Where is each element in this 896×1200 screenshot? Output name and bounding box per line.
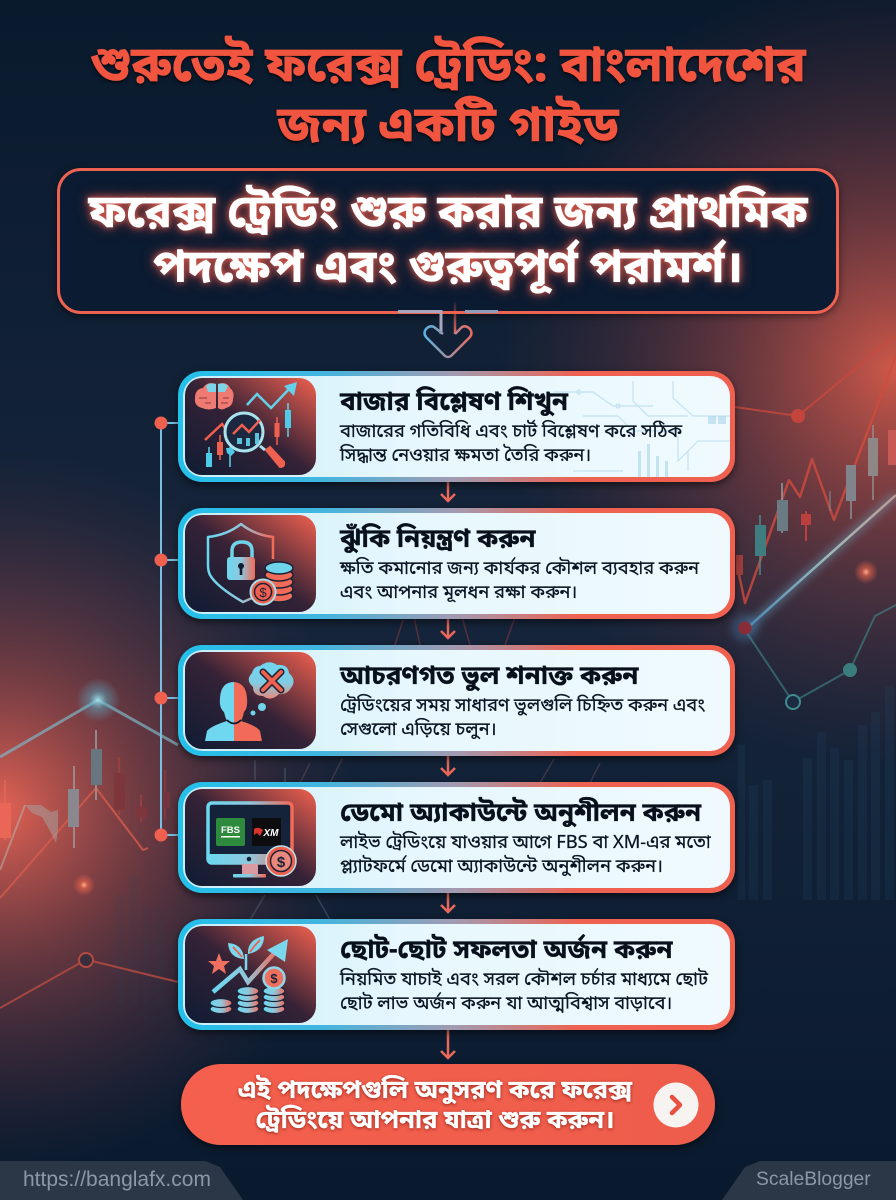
description: নিয়মিত যাচাই এবং সরল কৌশল চর্চার মাধ্যমে ছোট: [340, 969, 708, 993]
title: [90, 36, 808, 161]
left chart candles and nodes: [0, 678, 170, 967]
call to action button: [181, 1064, 715, 1145]
panel: step 2 risk control: এবং আপনার মূলধন রক্ষা করুন।: [340, 582, 577, 606]
footer tab: website: https://banglafx.com: [23, 1168, 211, 1191]
icon: growth arrow, plant and coin stacks: $: [270, 971, 278, 986]
right chart lines: [735, 335, 896, 702]
right chart candles and nodes: [731, 409, 896, 709]
bottom bars right: [738, 686, 894, 900]
heading: বাজার বিশ্লেষণ শিখুন: [340, 386, 568, 421]
central faint chart lines behind arrows: [250, 617, 600, 920]
panel: step 1 market analysis: সিদ্ধান্ত নেওয়ার ক্ষমতা তৈরি করুন।: [340, 445, 591, 469]
icon: brain, chart and magnifier: [185, 378, 316, 475]
arrow: subtitle down to steps: [398, 302, 498, 358]
panel: step 4 demo account: [178, 782, 735, 893]
icon: growth arrow, plant and coin stacks: [185, 926, 316, 1023]
panel: step 3 behavioural mistakes: [178, 645, 735, 756]
icon: chevron button: [654, 1082, 698, 1128]
icon: monitor with FBS and XM logos: FBS: [221, 825, 240, 836]
description: লাইভ ট্রেডিংয়ে যাওয়ার আগে FBS বা XM-এর মতো: [340, 832, 711, 856]
icon: monitor with FBS and XM logos: XM: [262, 828, 279, 839]
footer tab: brand: [720, 1161, 896, 1200]
panel: step 5 small wins: ছোট লাভ অর্জন করুন যা আত্মবিশ্বাস বাড়াবে।: [340, 993, 672, 1017]
icon: shield, lock and coins: [185, 515, 316, 612]
panel: step 1 market analysis: [178, 371, 735, 482]
title: শুরুতেই ফরেক্স ট্রেডিং: বাংলাদেশের: [90, 36, 806, 101]
icon: monitor with FBS and XM logos: $: [277, 854, 286, 871]
panel: step 3 behavioural mistakes: সেগুলো এড়িয়ে চলুন।: [340, 719, 497, 743]
heading: ডেমো অ্যাকাউন্টে অনুশীলন করুন: [340, 797, 701, 832]
circuit pattern: [553, 381, 730, 477]
arrow: step 4 to 5: [440, 893, 456, 914]
icon: person with thought bubble: [185, 652, 316, 749]
subtitle panel: [57, 168, 839, 314]
description: বাজারের গতিবিধি এবং চার্ট বিশ্লেষণ করে সঠিক: [340, 421, 682, 445]
subtitle panel: পদক্ষেপ এবং গুরুত্বপূর্ণ পরামর্শ।: [153, 240, 743, 301]
heading: ছোট-ছোট সফলতা অর্জন করুন: [340, 934, 673, 969]
footer tab: brand: ScaleBlogger: [756, 1169, 871, 1190]
icon: monitor with FBS and XM logos: [185, 789, 316, 886]
arrow: step 2 to 3: [440, 619, 456, 640]
heading: আচরণগত ভুল শনাক্ত করুন: [340, 660, 638, 695]
left chart lines: [0, 700, 178, 1008]
description: ক্ষতি কমানোর জন্য কার্যকর কৌশল ব্যবহার করুন: [340, 558, 699, 582]
heading: ঝুঁকি নিয়ন্ত্রণ করুন: [340, 523, 536, 558]
arrow: step 5 to call to action: [440, 1030, 456, 1060]
connector: left timeline with dots: [154, 416, 178, 842]
panel: step 2 risk control: [178, 508, 735, 619]
panel: step 4 demo account: প্ল্যাটফর্মে ডেমো অ্যাকাউন্টে অনুশীলন করুন।: [340, 856, 663, 880]
description: ট্রেডিংয়ের সময় সাধারণ ভুলগুলি চিহ্নিত করুন এবং: [340, 695, 705, 719]
arrow: step 3 to 4: [440, 756, 456, 777]
call to action button: ট্রেডিংয়ে আপনার যাত্রা শুরু করুন।: [256, 1106, 614, 1139]
call to action button: এই পদক্ষেপগুলি অনুসরণ করে ফরেক্স: [238, 1076, 632, 1109]
arrow: step 1 to 2: [440, 482, 456, 503]
title: জন্য একটি গাইড: [277, 96, 619, 161]
footer tab: website: [0, 1161, 245, 1200]
bottom bars left: [115, 875, 164, 1008]
subtitle panel: ফরেক্স ট্রেডিং শুরু করার জন্য প্রাথমিক: [88, 185, 808, 246]
icon: shield, lock and coins: $: [259, 585, 267, 600]
panel: step 5 small wins: [178, 919, 735, 1030]
